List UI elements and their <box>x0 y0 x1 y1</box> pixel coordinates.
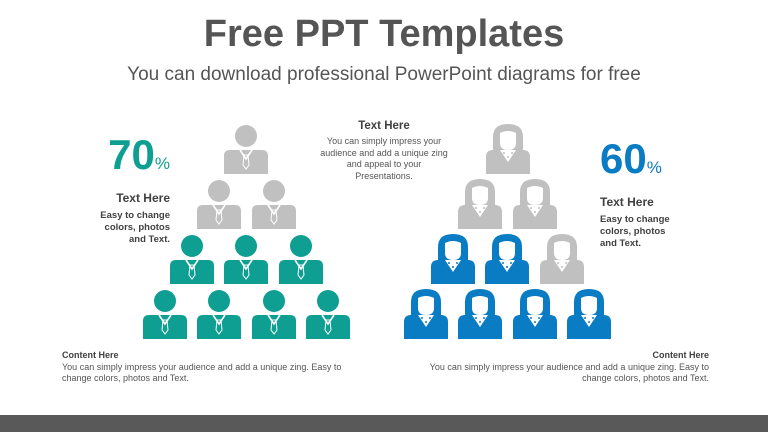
right stat 60%: Text Here <box>600 195 654 209</box>
left stat 70%: Easy to change <box>100 210 170 221</box>
right stat 60%: 60% <box>600 135 662 182</box>
left stat 70%: and Text. <box>129 234 170 245</box>
center text block: You can simply impress your audience and add a unique zing and appeal to your Presentations. <box>320 136 448 180</box>
left stat 70%: colors, photos <box>105 222 170 233</box>
right content text: You can simply impress your audience and add a unique zing. Easy to change colors, photos and Text. <box>430 362 709 383</box>
left content text: You can simply impress your audience and add a unique zing. Easy to change colors, photos and Text. <box>62 362 341 383</box>
center text block: Text Here <box>358 120 410 132</box>
subtitle: You can download professional PowerPoint diagrams for free <box>127 64 641 85</box>
left stat 70%: 70% <box>108 131 170 178</box>
right content text <box>430 350 709 383</box>
right stat 60% <box>600 135 670 249</box>
male pyramid <box>143 125 350 339</box>
left content text <box>62 350 341 383</box>
right stat 60%: colors, photos <box>600 226 665 237</box>
female pyramid <box>404 124 611 339</box>
right stat 60%: Easy to change <box>600 214 670 225</box>
left content text: Content Here <box>62 350 119 360</box>
left stat 70% <box>100 131 170 245</box>
footer bar <box>0 415 768 432</box>
right stat 60%: and Text. <box>600 238 641 249</box>
left stat 70%: Text Here <box>116 191 170 205</box>
right content text: Content Here <box>652 350 709 360</box>
title: Free PPT Templates <box>204 13 564 55</box>
